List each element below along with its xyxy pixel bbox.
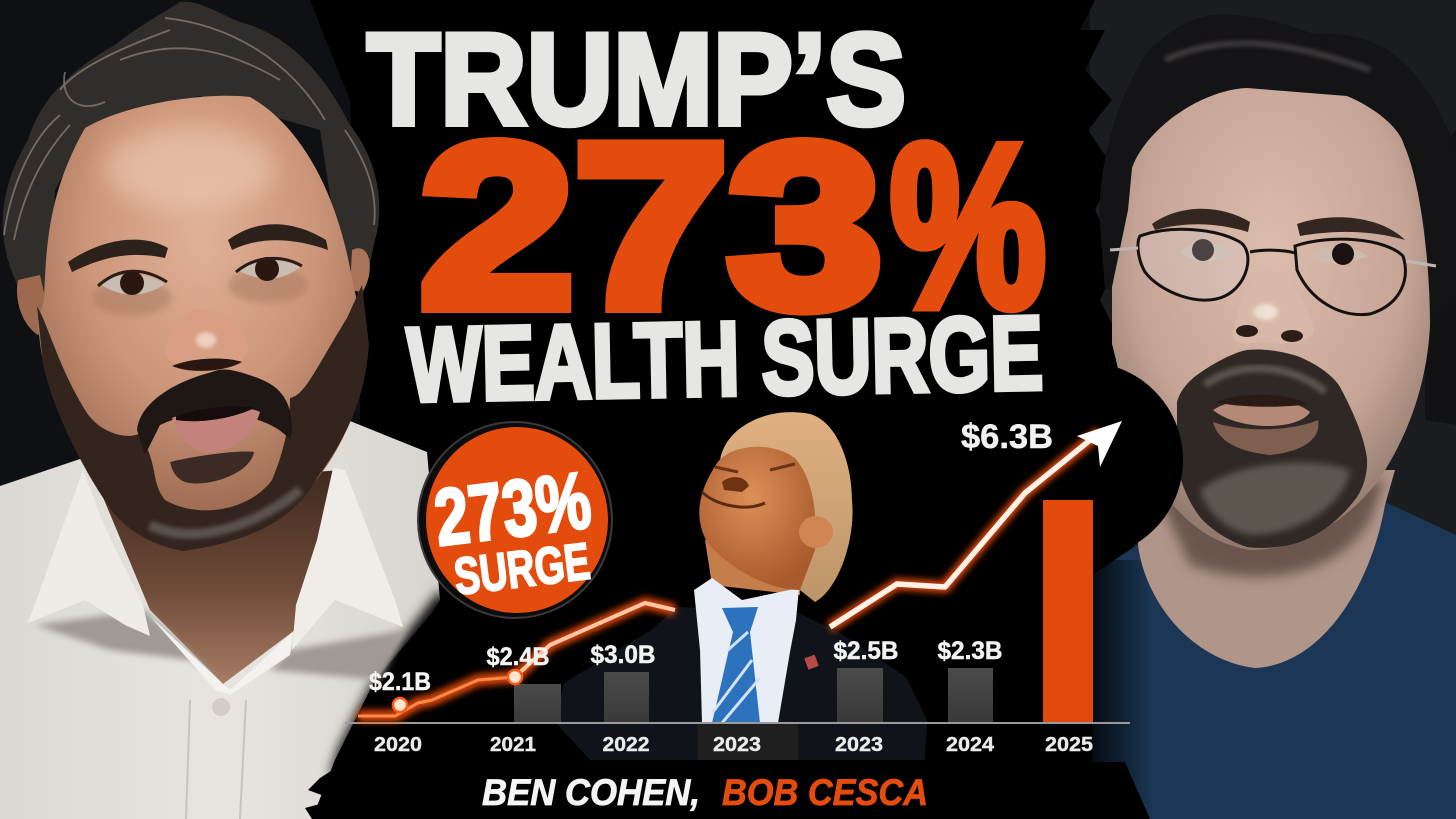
neck shadow <box>1160 480 1385 577</box>
flag pin <box>804 655 819 670</box>
button <box>212 698 230 716</box>
forehead shine <box>105 126 275 210</box>
shirt <box>694 578 799 723</box>
head <box>699 447 816 590</box>
soul patch <box>170 452 254 483</box>
nose <box>1233 270 1314 344</box>
face <box>1112 88 1430 550</box>
chart <box>345 418 1130 756</box>
white shirt <box>0 417 440 819</box>
year labels: 2024 <box>946 734 995 756</box>
nose <box>165 309 248 371</box>
hair <box>1100 15 1456 325</box>
badge: 273% surge <box>418 422 612 618</box>
year labels: 2022 <box>602 734 650 756</box>
collar shadow <box>35 610 405 680</box>
value labels: $3.0B <box>590 641 656 669</box>
headset <box>1425 130 1456 425</box>
orange 2025 bar <box>1043 500 1093 722</box>
grey hair strands <box>4 18 375 240</box>
shirt shadow <box>1092 560 1152 819</box>
eyebrows <box>68 240 168 272</box>
main title: TRUMP'S: TRUMP’S <box>367 6 906 152</box>
ear <box>799 516 833 548</box>
tie <box>712 607 760 723</box>
main title: WEALTH SURGE: WEALTH SURGE <box>406 295 1044 424</box>
left person: Ben Cohen <box>0 2 480 819</box>
year labels <box>374 734 1093 756</box>
beard grey flecks <box>150 490 300 534</box>
placket <box>186 700 246 819</box>
brushed ring <box>418 422 612 618</box>
value labels <box>369 418 1053 696</box>
moustache <box>137 370 292 455</box>
year labels: 2021 <box>490 734 536 756</box>
badge text: 273% <box>430 455 595 563</box>
lips <box>1213 399 1310 426</box>
shirt collar <box>28 468 405 819</box>
ears <box>17 275 50 335</box>
year labels: 2025 <box>1045 734 1093 756</box>
bottom brushed black bar <box>305 762 1150 819</box>
arrowhead <box>1077 421 1122 467</box>
goatee grey part <box>1200 463 1350 535</box>
chin skin <box>1213 420 1318 455</box>
year labels: 2023 <box>713 734 761 756</box>
main title: 273%: 273 <box>420 97 882 356</box>
main title: 273% <box>420 97 1046 356</box>
Trump figure <box>555 412 927 760</box>
main title: 273%: % <box>890 97 1046 356</box>
neck <box>705 540 800 595</box>
beard <box>37 285 369 551</box>
badge text: SURGE <box>451 533 593 607</box>
value labels: $2.4B <box>486 643 550 671</box>
glasses <box>1110 229 1436 315</box>
names <box>482 772 928 813</box>
neck <box>100 470 340 684</box>
names: BOB CESCA <box>722 772 928 813</box>
value labels: $2.5B <box>834 637 898 665</box>
spray fade of shirt <box>330 590 480 775</box>
goatee <box>1177 349 1367 548</box>
neck <box>1137 470 1395 668</box>
value labels: $6.3B <box>961 418 1053 456</box>
value labels: $2.3B <box>938 637 1002 665</box>
glow of trend line <box>358 432 1100 716</box>
grey bars <box>514 668 993 722</box>
names: BEN COHEN, <box>482 772 700 813</box>
hair sheen <box>1165 43 1370 70</box>
orange disc <box>426 427 608 613</box>
dark t-shirt <box>1092 502 1456 819</box>
eyes <box>92 257 308 316</box>
trend line <box>358 432 1100 716</box>
trousers shade <box>698 724 798 760</box>
hair <box>720 412 853 602</box>
black circle behind arrow <box>987 362 1183 558</box>
face <box>38 96 365 545</box>
mouth <box>172 406 260 453</box>
eyebrows <box>1152 209 1250 232</box>
year labels: 2023 <box>835 734 883 756</box>
eyes <box>1180 239 1368 265</box>
hair <box>3 2 379 300</box>
badge text <box>430 455 601 608</box>
moustache highlight <box>1205 369 1325 392</box>
value labels: $2.1B <box>369 668 431 696</box>
suit jacket <box>555 607 927 760</box>
baseline axis <box>345 722 1130 724</box>
data points <box>393 670 522 712</box>
right person: Bob Cesca <box>1092 15 1456 819</box>
central brushed black panel <box>305 0 1150 819</box>
face features <box>702 464 795 507</box>
year labels: 2020 <box>374 734 422 756</box>
